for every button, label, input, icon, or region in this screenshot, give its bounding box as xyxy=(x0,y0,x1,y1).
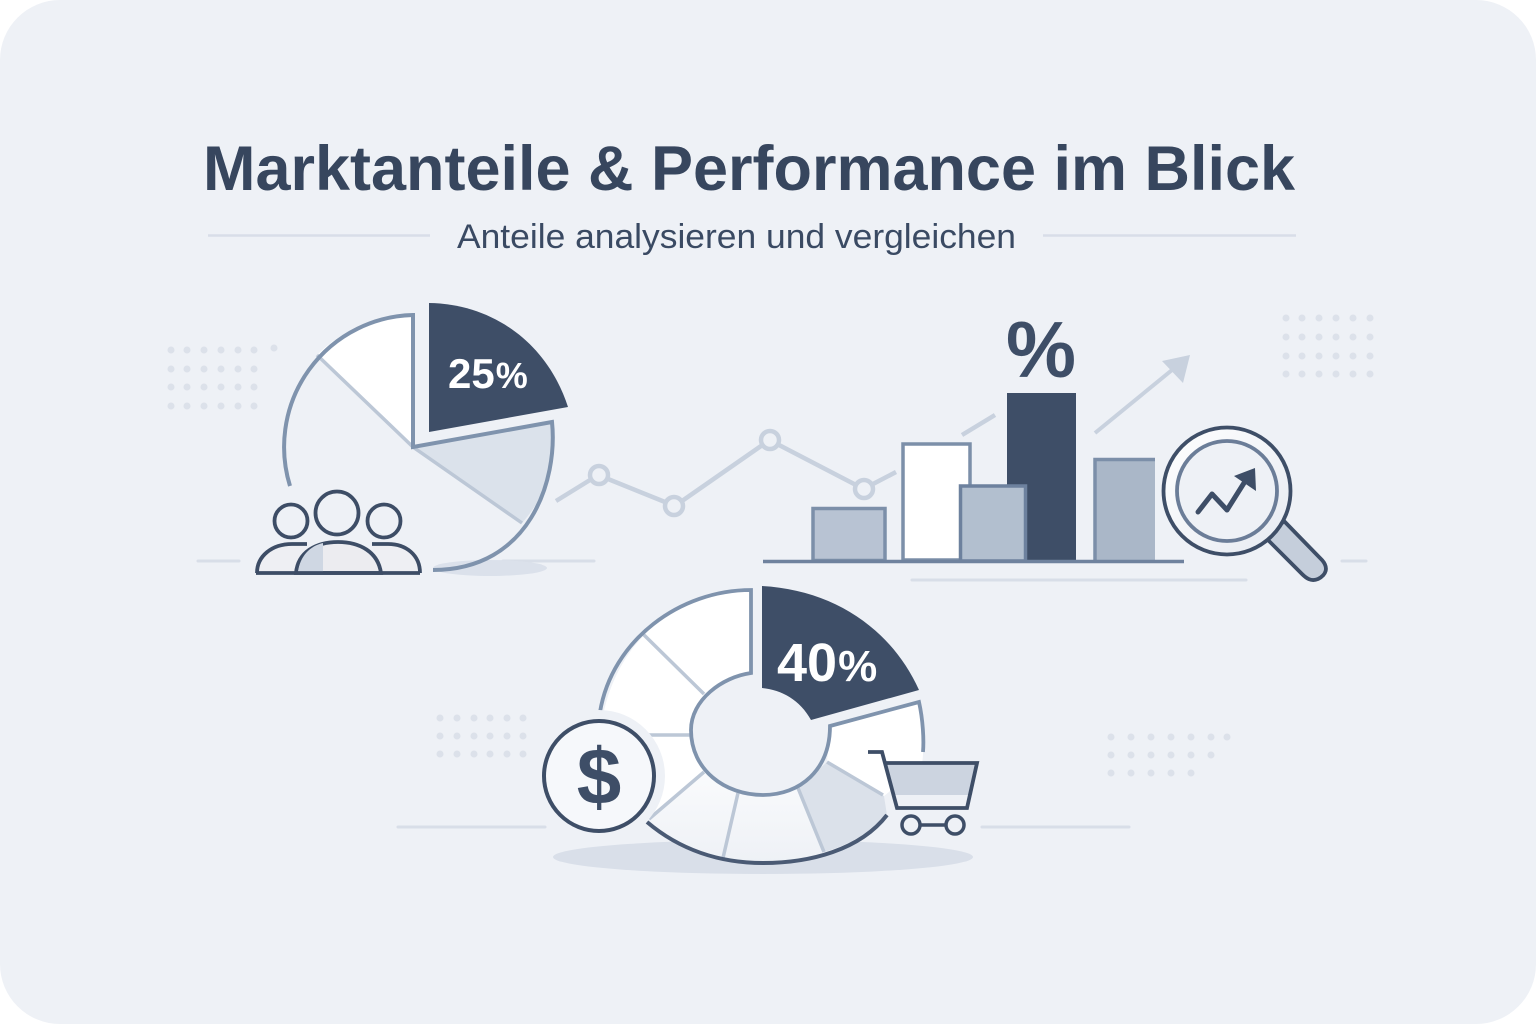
pie: light slice xyxy=(413,422,554,523)
pie: 25% dark slice xyxy=(429,303,568,432)
percent symbol: % xyxy=(1006,305,1076,394)
donut: light blue segment xyxy=(798,762,887,852)
donut: lower segments xyxy=(649,762,887,863)
title: Marktanteile & Performance im Blick xyxy=(203,134,1296,204)
dot pattern: lower right xyxy=(1108,734,1230,776)
icon: shopping cart xyxy=(868,752,977,834)
donut chart with 40% slice xyxy=(553,586,973,874)
pie chart with 25% slice xyxy=(284,303,568,576)
donut: white upper left segments xyxy=(600,590,751,820)
bar chart xyxy=(763,393,1184,562)
subtitle: Anteile analysieren und vergleichen xyxy=(457,218,1016,256)
label 40%: 40% xyxy=(777,633,877,693)
line chart with markers xyxy=(556,415,995,515)
dot pattern: upper right xyxy=(1282,314,1374,378)
donut: 40% dark slice xyxy=(762,586,919,720)
dot pattern: upper left xyxy=(168,344,278,410)
dot pattern: lower left xyxy=(436,714,526,758)
icon: dollar coin: $ xyxy=(577,732,621,821)
icon: dollar coin xyxy=(533,710,665,842)
donut: center hole xyxy=(691,673,830,795)
pie: white slice xyxy=(317,315,413,447)
donut: white right segment xyxy=(827,702,923,796)
donut ground shadow xyxy=(553,840,973,874)
icon: magnifying glass xyxy=(1164,428,1326,580)
growth arrow xyxy=(1095,355,1190,433)
icon: people xyxy=(256,492,420,573)
label 25%: 25% xyxy=(448,350,528,397)
